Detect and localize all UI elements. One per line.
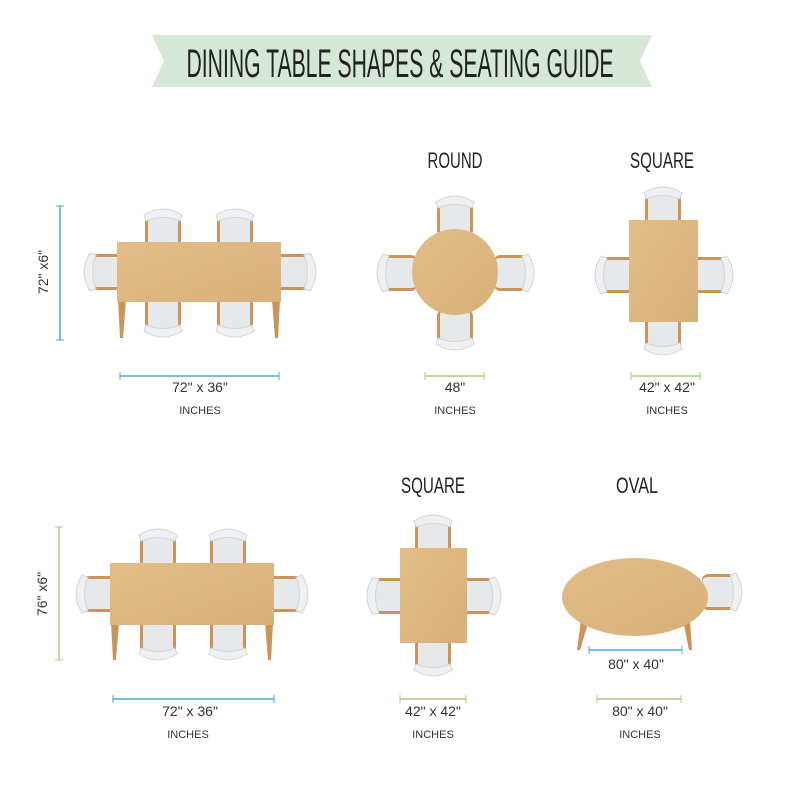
panel: round table: ROUND	[428, 148, 482, 173]
panel: square table bottom: 42" x 42"	[405, 703, 461, 719]
panel: square table bottom	[367, 473, 501, 741]
panel: square table top: SQUARE	[630, 148, 694, 173]
panel: oval table: INCHES	[619, 729, 661, 741]
panel: square table bottom: SQUARE	[401, 473, 465, 498]
panel: round table: INCHES	[434, 405, 476, 417]
panel: oval table: 80" x 40"	[608, 656, 664, 672]
panel: rectangle table bottom: INCHES	[167, 729, 209, 741]
panel: rectangle table bottom: 72" x 36"	[162, 703, 218, 719]
panel: square table top	[595, 148, 733, 417]
panel: oval table: 80" x 40"	[612, 703, 668, 719]
panel: square table top: INCHES	[646, 405, 688, 417]
panel: square table bottom: INCHES	[412, 729, 454, 741]
panel: rectangle table top: 72" x6"	[35, 250, 51, 294]
panel: oval table	[562, 473, 742, 741]
panel: oval table: OVAL	[616, 473, 658, 498]
panel: rectangle table top: 72" x 36"	[172, 379, 228, 395]
panel: round table: 48"	[445, 379, 465, 395]
title banner	[152, 35, 652, 87]
panel: rectangle table top	[35, 206, 316, 417]
panel: rectangle table bottom: 76" x6"	[34, 572, 50, 616]
panel: round table	[377, 148, 534, 417]
panel: square table top: 42" x 42"	[639, 379, 695, 395]
panel: rectangle table bottom	[34, 527, 308, 741]
panel: rectangle table top: INCHES	[179, 405, 221, 417]
